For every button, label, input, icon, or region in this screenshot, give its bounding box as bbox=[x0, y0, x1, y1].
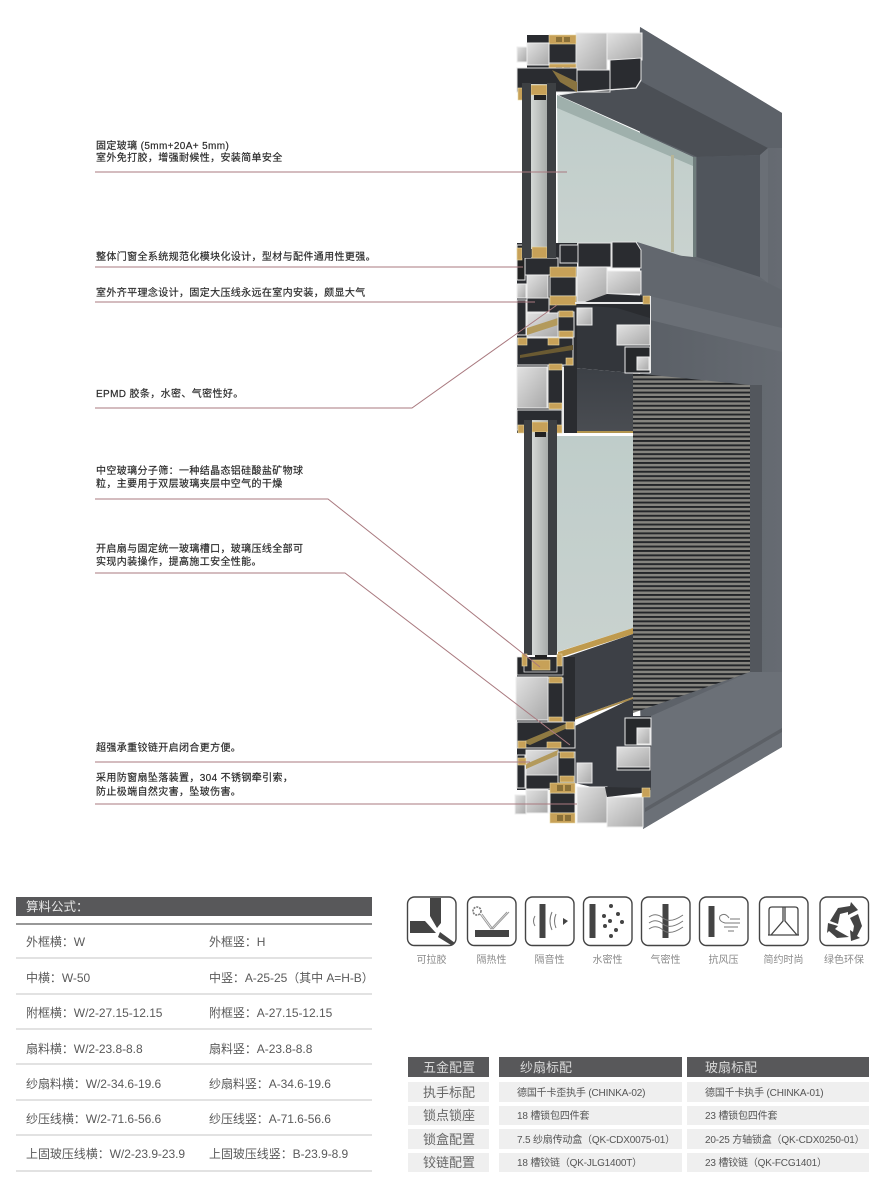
hardware row: lock box bbox=[408, 1129, 869, 1149]
profile: middle section bbox=[517, 240, 651, 433]
formula values: 纱扇料横：W/2-34.6-19.6 bbox=[26, 1076, 162, 1091]
hardware row: lock box: 20-25 方轴锁盒（QK-CDX0250-01） bbox=[705, 1133, 864, 1146]
icon: wind resistance: 抗风压 bbox=[708, 953, 738, 966]
callout: molecular sieve bbox=[95, 464, 540, 667]
section backing fill bbox=[517, 35, 577, 790]
icon: simple style: 简约时尚 bbox=[764, 953, 804, 966]
formula values: 附框竖：A-27.15-12.15 bbox=[209, 1006, 333, 1020]
window cutaway illustration bbox=[515, 27, 782, 829]
callout: modular system: 整体门窗全系统规范化模块化设计，型材与配件通用性更强。 bbox=[96, 250, 376, 263]
icon: glue bbox=[408, 897, 456, 966]
hardware row: handle: 德国千卡执手 (CHINKA-01) bbox=[705, 1086, 823, 1099]
ledge below fixed glass bbox=[637, 242, 782, 330]
lower glass edge section bbox=[524, 420, 557, 670]
lower inner dark panel bbox=[563, 634, 633, 722]
icon: heat insulation bbox=[468, 897, 516, 966]
formula values: 附框横：W/2-27.15-12.15 bbox=[26, 1006, 163, 1020]
icon: simple style bbox=[760, 897, 808, 966]
hardware row: hinge: 铰链配置 bbox=[423, 1155, 475, 1170]
callout: fixed glass: 室外免打胶，增强耐候性，安装简单安全 bbox=[96, 151, 283, 164]
icon: air tightness bbox=[642, 897, 690, 966]
callout: EPDM strip: EPMD 胶条，水密、气密性好。 bbox=[96, 387, 244, 400]
icon: recycle: 绿色环保 bbox=[824, 953, 864, 966]
formula heading bbox=[16, 897, 372, 916]
callout: molecular sieve: 粒，主要用于双层玻璃夹层中空气的干燥 bbox=[96, 477, 283, 490]
callout: anti-fall device bbox=[95, 771, 577, 804]
profile: bottom section bbox=[515, 654, 651, 827]
upper gold bead of lower glass bbox=[557, 431, 633, 433]
callout: glass slot: 实现内装操作，提高施工安全性能。 bbox=[96, 555, 262, 568]
sill interior step bbox=[575, 698, 651, 797]
profile: top section bbox=[517, 33, 642, 100]
upper opening ceiling bbox=[558, 80, 768, 157]
formula values: 外框竖：H bbox=[209, 935, 265, 949]
hardware row: lock point: 锁点锁座 bbox=[423, 1108, 475, 1123]
table: hardware configuration bbox=[408, 1057, 869, 1172]
middle interior dark backing bbox=[564, 303, 650, 373]
hardware row: handle: 执手标配 bbox=[423, 1085, 475, 1100]
insect screen mesh bbox=[633, 373, 750, 713]
callout: flush design: 室外齐平理念设计，固定大压线永远在室内安装，颇显大气 bbox=[96, 286, 366, 299]
formula values bbox=[26, 935, 374, 1161]
lower glass pane bbox=[557, 436, 633, 652]
callout: molecular sieve: 中空玻璃分子筛：一种结晶态铝硅酸盐矿物球 bbox=[96, 464, 303, 477]
formula values: 外框横：W bbox=[26, 935, 86, 949]
formula values: 纱压线横：W/2-71.6-56.6 bbox=[26, 1112, 162, 1126]
callout: fixed glass: 固定玻璃 (5mm+20A+ 5mm) bbox=[96, 139, 229, 152]
formula values: 上固玻压线竖：B-23.9-8.9 bbox=[209, 1147, 349, 1161]
icon: glue: 可拉胶 bbox=[416, 953, 446, 966]
hardware row: handle bbox=[408, 1082, 869, 1102]
panel: cutting formulas bbox=[16, 897, 374, 1171]
upper opening side reveal bbox=[760, 148, 768, 283]
icon: wind resistance bbox=[700, 897, 748, 966]
outer frame face bbox=[640, 27, 782, 829]
sill face bbox=[643, 672, 782, 829]
icon: recycle bbox=[820, 897, 868, 966]
formula heading: 算料公式： bbox=[26, 899, 89, 914]
icon: water tightness bbox=[584, 897, 632, 966]
callout: glass slot bbox=[95, 542, 570, 745]
upper frame band bbox=[638, 27, 782, 148]
hardware row: handle: 德国千卡歪执手 (CHINKA-02) bbox=[517, 1086, 645, 1099]
callout: anti-fall device: 采用防窗扇坠落装置，304 不锈钢牵引索， bbox=[96, 771, 293, 784]
icon: air tightness: 气密性 bbox=[650, 953, 680, 966]
icon: sound insulation bbox=[526, 897, 574, 966]
fixed glass edge section bbox=[522, 83, 556, 249]
lower opening side reveal bbox=[750, 385, 762, 672]
callout: hinge: 超强承重铰链开启闭合更方便。 bbox=[96, 741, 241, 754]
fixed glass pane bbox=[557, 95, 696, 257]
formula values: 扇料横：W/2-23.8-8.8 bbox=[26, 1041, 143, 1056]
lower gold bead bbox=[558, 628, 633, 658]
hardware row: lock point: 18 槽锁包四件套 bbox=[517, 1109, 589, 1122]
formula values: 上固玻压线横：W/2-23.9-23.9 bbox=[26, 1147, 185, 1161]
hardware table header: 五金配置 bbox=[423, 1060, 475, 1075]
hardware row: hinge: 23 槽铰链（QK-FCG1401） bbox=[705, 1156, 827, 1169]
icon: sound insulation: 隔音性 bbox=[534, 953, 564, 966]
formula values: 中竖：A-25-25（其中 A=H-B） bbox=[209, 970, 374, 985]
hardware row: lock box: 锁盒配置 bbox=[423, 1132, 475, 1147]
lower interior dark wall bbox=[564, 367, 633, 432]
formula values: 中横：W-50 bbox=[26, 970, 90, 985]
hardware table header: 纱扇标配 bbox=[520, 1060, 572, 1075]
hardware table header bbox=[408, 1057, 869, 1077]
hardware row: hinge bbox=[408, 1153, 869, 1172]
callout: anti-fall device: 防止极端自然灾害，坠玻伤害。 bbox=[96, 785, 241, 798]
formula values: 扇料竖：A-23.8-8.8 bbox=[209, 1041, 313, 1056]
hardware row: hinge: 18 槽铰链（QK-JLG1400T） bbox=[517, 1156, 642, 1169]
formula values: 纱扇料竖：A-34.6-19.6 bbox=[209, 1076, 331, 1091]
upper opening back wall bbox=[697, 155, 760, 277]
icon: water tightness: 水密性 bbox=[592, 953, 622, 966]
hardware row: lock point: 23 槽锁包四件套 bbox=[705, 1109, 777, 1122]
callout: glass slot: 开启扇与固定统一玻璃槽口，玻璃压线全部可 bbox=[96, 542, 303, 555]
formula values: 纱压线竖：A-71.6-56.6 bbox=[209, 1112, 331, 1126]
hardware row: lock box: 7.5 纱扇传动盒（QK-CDX0075-01） bbox=[517, 1133, 675, 1146]
callout: EPDM strip bbox=[95, 305, 557, 408]
callout: fixed glass bbox=[95, 139, 567, 172]
icon: heat insulation: 隔热性 bbox=[476, 953, 506, 966]
hardware row: lock point bbox=[408, 1106, 869, 1125]
hardware table header: 玻扇标配 bbox=[705, 1060, 757, 1075]
